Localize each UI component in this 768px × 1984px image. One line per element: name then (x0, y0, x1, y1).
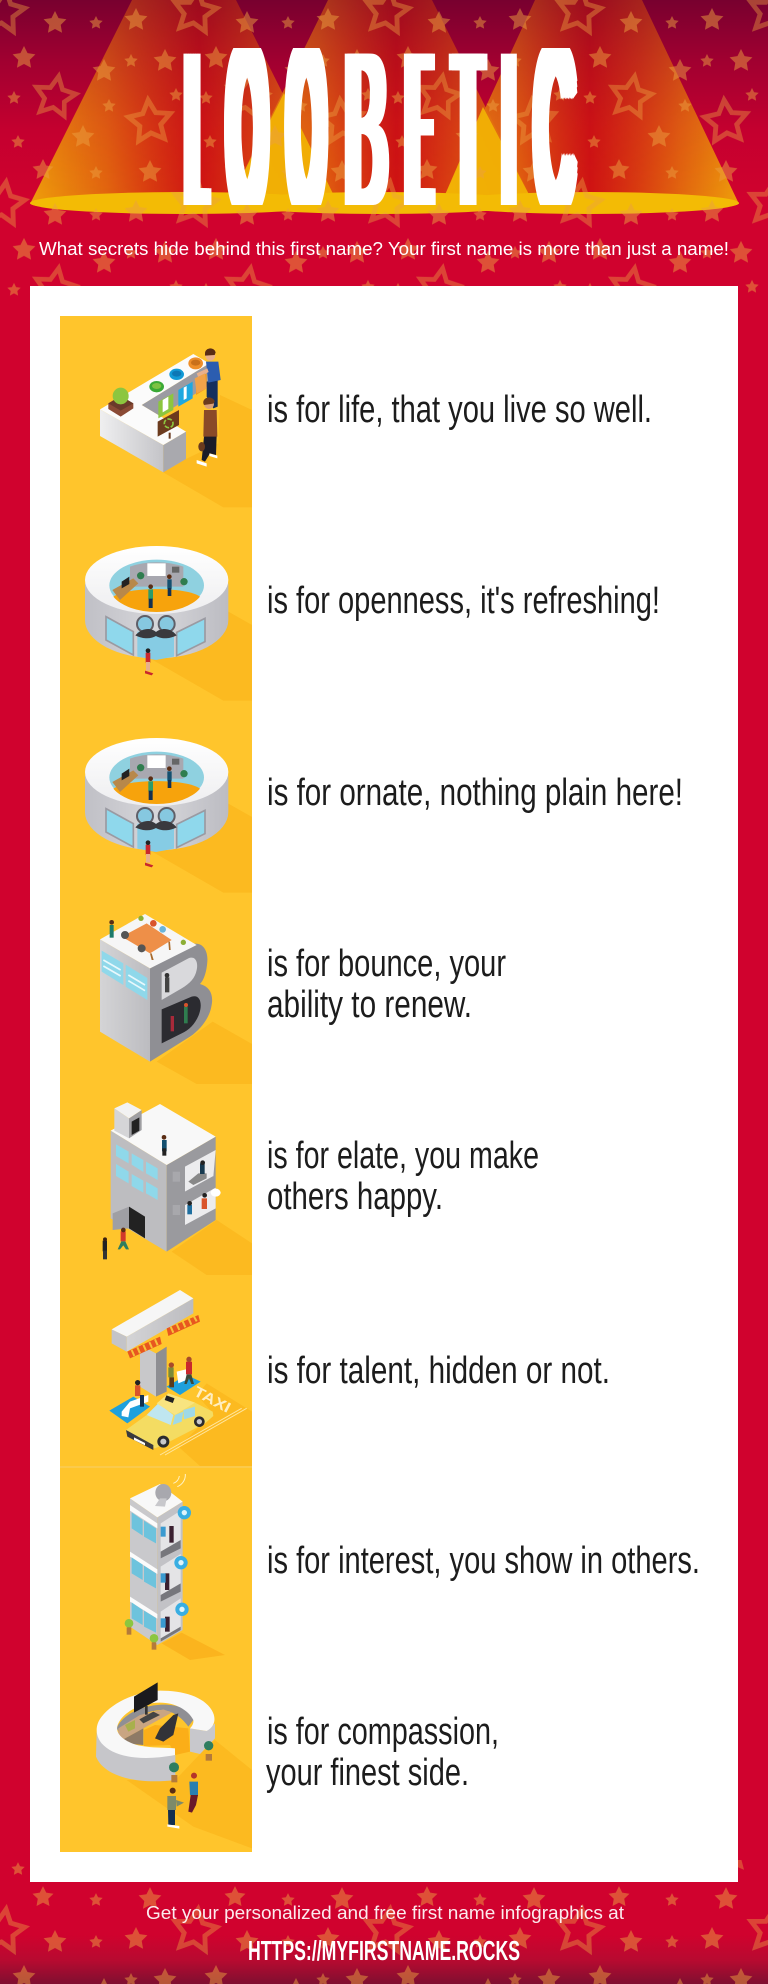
text: row E: is for elate, you make (267, 1135, 539, 1177)
title: B (345, 6, 387, 252)
text: row B: ability to renew. (267, 984, 472, 1026)
icon: building letter E (103, 1102, 252, 1275)
icon: tower letter I (125, 1474, 225, 1660)
panel: yellow illustration column with eight isometric letter scenes (60, 316, 252, 1852)
title: T (454, 6, 483, 252)
title: I (485, 6, 532, 252)
icon: optician ring O second (85, 738, 252, 893)
title: L (188, 6, 205, 252)
divider between taxi and tower (60, 1466, 252, 1468)
text: row E (267, 1135, 539, 1218)
text: row C (266, 1711, 499, 1794)
stars bottom (0, 1860, 768, 1984)
icon: taxi stand letter T: TAXI (191, 1384, 233, 1417)
footer call to action: Get your personalized and free first name infographics at (146, 1903, 624, 1923)
panel: white content card (30, 286, 738, 1882)
spotlight overlaps (228, 93, 534, 204)
subtitle: What secrets hide behind this first name? Your first name is more than just a name! (39, 239, 729, 259)
icon: taxi stand letter T (109, 1290, 252, 1466)
icon: optician ring O (85, 546, 252, 701)
footer url: HTTPS://MYFIRSTNAME.ROCKS (248, 1935, 520, 1966)
spotlight floor pools (30, 192, 739, 214)
icon: building letter B (100, 914, 252, 1084)
spotlight beams (30, 0, 739, 204)
text: row T: is for talent, hidden or not. (267, 1350, 610, 1392)
text: row C: your finest side. (266, 1752, 469, 1794)
text: row O: is for openness, it's refreshing! (267, 580, 660, 622)
text: row C: is for compassion, (267, 1711, 499, 1753)
text: row B: is for bounce, your (267, 943, 506, 985)
title (183, 6, 578, 252)
icon: reception desk letter C (96, 1682, 252, 1848)
text: row B (267, 943, 506, 1026)
text: row L: is for life, that you live so well. (267, 389, 652, 431)
text: row E: others happy. (267, 1176, 443, 1218)
title: E (408, 6, 431, 252)
stars top (0, 0, 768, 300)
icon: recycling counter L (100, 348, 252, 507)
